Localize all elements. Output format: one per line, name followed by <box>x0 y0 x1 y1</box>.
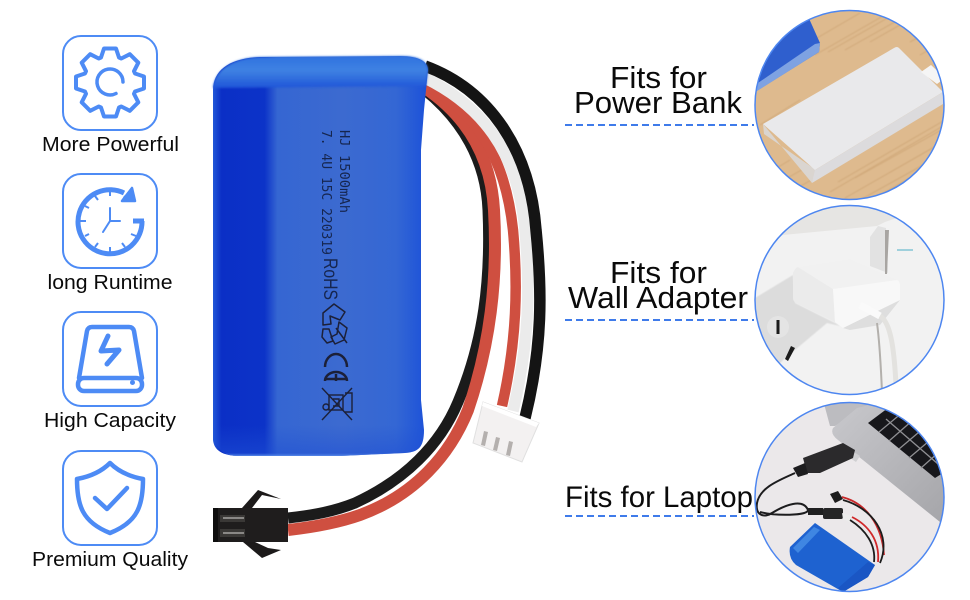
callout: fits for wall adapter <box>565 255 754 320</box>
small plug <box>808 491 843 519</box>
battery print: recycling mark <box>322 304 347 344</box>
heading: fits for power bank <box>574 60 743 120</box>
heading: fits for wall adapter: Wall Adapter <box>568 280 748 315</box>
callout: fits for power bank <box>565 60 754 125</box>
cable <box>757 473 808 516</box>
wire: balance red lead <box>425 84 516 406</box>
heading: fits for laptop: Fits for Laptop <box>565 481 753 514</box>
photo ring: wall adapter <box>755 206 944 394</box>
photo ring: laptop <box>755 402 944 592</box>
socket slots <box>776 320 795 361</box>
wire: balance white lead <box>425 78 528 411</box>
battery top cap <box>213 56 428 88</box>
battery print: CE mark <box>325 354 347 381</box>
battery print: crossed bin mark <box>322 388 352 420</box>
charger <box>793 284 900 330</box>
power bank <box>763 47 945 183</box>
wire: main red lead <box>288 88 495 530</box>
battery print: voltage and date: 7. 4U 15C 220319 <box>318 130 334 255</box>
photo: wall adapter <box>756 206 943 394</box>
wire: main black lead <box>288 90 489 518</box>
label: high capacity: High Capacity <box>44 410 176 432</box>
photo: power bank on wood <box>756 11 944 199</box>
connector: white balance plug <box>473 402 539 462</box>
battery body <box>213 56 428 456</box>
label: premium quality: Premium Quality <box>32 549 188 571</box>
battery bottom edge <box>214 425 424 456</box>
photo ring: power bank <box>755 10 944 200</box>
laptop <box>824 403 944 522</box>
battery print: RoHS: RoHS <box>319 258 340 300</box>
label: long runtime: long Runtime <box>48 272 172 294</box>
icon: clock with arrow <box>63 174 157 268</box>
wood grain <box>760 13 942 198</box>
textured wall band <box>782 206 895 235</box>
heading: fits for wall adapter: Fits for <box>610 255 707 290</box>
usb dongle <box>793 443 860 477</box>
icon: gear <box>63 36 157 130</box>
battery pack <box>213 56 428 456</box>
mini battery <box>790 523 875 592</box>
wire: balance black lead <box>425 66 540 418</box>
heading: fits for power bank: Fits for <box>610 60 707 95</box>
wires: battery leads <box>288 66 540 530</box>
blue item in corner <box>756 20 820 91</box>
icon: shield with check <box>63 451 157 545</box>
icon: storage drive with bolt <box>63 312 157 406</box>
mini battery wires <box>842 497 884 563</box>
heading: fits for wall adapter <box>568 255 748 315</box>
panel: premium quality feature <box>32 451 188 571</box>
label: more powerful: More Powerful <box>42 134 179 156</box>
panel: long runtime feature <box>48 174 172 294</box>
battery print: HJ 1500mAh: HJ 1500mAh <box>336 130 352 213</box>
connector: black SM plug <box>213 490 288 558</box>
diagonal shadow <box>756 276 838 363</box>
notch shadow and edge <box>870 226 889 274</box>
panel: more powerful feature <box>42 36 179 156</box>
cable <box>870 311 898 388</box>
heading: fits for power bank: Power Bank <box>574 85 743 120</box>
indicator light <box>897 249 913 251</box>
panel: high capacity feature <box>44 312 176 432</box>
photo: laptop with charging cable and battery <box>756 403 944 591</box>
